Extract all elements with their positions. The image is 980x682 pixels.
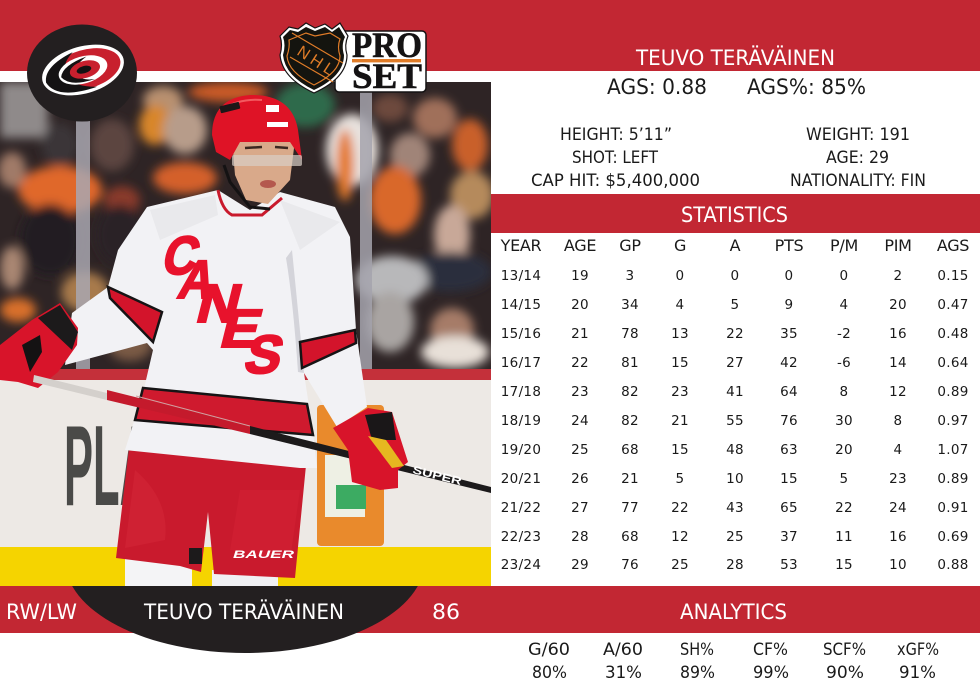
statistics table: 81: [621, 355, 639, 371]
statistics table: 16/17: [501, 355, 541, 371]
black name arc: [72, 586, 418, 653]
pro set logo: [280, 23, 426, 96]
player name heading: TEUVO TERÄVÄINEN: [635, 45, 835, 70]
analytics table: SH%: [680, 640, 714, 659]
player bio left: HEIGHT: 5’11”: [560, 125, 672, 144]
left glove: [0, 303, 78, 388]
crowd behind glass: [0, 82, 494, 372]
player bio right: WEIGHT: 191: [806, 125, 910, 144]
statistics table: 30: [835, 413, 853, 429]
orange board ad: [317, 405, 384, 546]
statistics table: 76: [780, 413, 798, 429]
statistics band: [491, 194, 980, 233]
jersey wordmark: S: [239, 324, 290, 385]
statistics table: 64: [780, 384, 798, 400]
statistics table: 15: [671, 442, 689, 458]
table header: G: [674, 236, 686, 255]
icon: hurricanes logo: [36, 36, 130, 104]
statistics table: 42: [780, 355, 798, 371]
jersey number: 86: [432, 600, 460, 624]
logo wordmark: PRO: [352, 25, 422, 65]
statistics table: 20: [889, 297, 907, 313]
statistics table: 27: [571, 500, 589, 516]
statistics heading: STATISTICS: [681, 203, 788, 227]
icon: nhl shield: [280, 23, 348, 93]
jersey wordmark: [164, 235, 283, 374]
player bio left: SHOT: LEFT: [572, 148, 659, 167]
jersey collar: [218, 190, 282, 215]
hem stripe: [135, 388, 313, 435]
pro set logo: SET: [352, 56, 422, 96]
jersey wordmark: A: [173, 249, 222, 310]
analytics table: xGF%: [897, 640, 939, 659]
table header: PIM: [884, 236, 912, 255]
statistics table: 25: [571, 442, 589, 458]
statistics table: 20: [835, 442, 853, 458]
analytics table: 99%: [753, 663, 789, 682]
statistics table: 16: [889, 529, 907, 545]
header band: [0, 0, 980, 71]
statistics table: 53: [780, 557, 798, 573]
statistics table: 14/15: [501, 297, 541, 313]
table header: A: [730, 236, 741, 255]
statistics table: 0.88: [937, 557, 969, 573]
analytics table: 90%: [826, 663, 864, 682]
statistics table: 8: [894, 413, 902, 429]
player name: TEUVO TERÄVÄINEN: [143, 599, 344, 624]
analytics table: [528, 640, 939, 682]
stick brand text: SUPER: [411, 464, 463, 488]
analytics table: A/60: [603, 640, 643, 659]
statistics table: 37: [780, 529, 798, 545]
statistics table: 15: [835, 557, 853, 573]
statistics table: 0.97: [937, 413, 969, 429]
statistics table: 0.89: [937, 384, 969, 400]
table header: AGS: [937, 236, 969, 255]
statistics table: 3: [626, 268, 634, 284]
player bio right: NATIONALITY: FIN: [790, 171, 926, 190]
shield text: NHL: [294, 43, 337, 79]
statistics table: 0: [731, 268, 739, 284]
statistics table: 68: [621, 442, 639, 458]
dasher boards: [0, 369, 491, 586]
statistics table: 5: [676, 471, 684, 487]
statistics table: 0: [676, 268, 684, 284]
legs: [125, 559, 278, 586]
table header: P/M: [830, 236, 858, 255]
jersey wordmark: C: [157, 225, 206, 286]
statistics table: 24: [889, 500, 907, 516]
statistics table: 76: [621, 557, 639, 573]
statistics table: 21/22: [501, 500, 541, 516]
statistics table: 2: [894, 268, 902, 284]
statistics table: 0.47: [937, 297, 969, 313]
analytics table: SCF%: [823, 640, 866, 659]
statistics table: 26: [571, 471, 589, 487]
statistics table: 16: [889, 326, 907, 342]
right sleeve stripe: [300, 330, 356, 368]
player bio right: [790, 125, 926, 190]
statistics table: 19: [571, 268, 589, 284]
statistics table: 21: [571, 326, 589, 342]
statistics table: 9: [785, 297, 793, 313]
analytics table: 89%: [680, 663, 715, 682]
table header: AGE: [564, 236, 596, 255]
statistics table: 22: [571, 355, 589, 371]
ags score: AGS%: 85%: [747, 75, 866, 100]
bottom band: [0, 586, 980, 633]
statistics table: 12: [889, 384, 907, 400]
position label: RW/LW: [6, 600, 77, 624]
table header: YEAR: [500, 236, 542, 255]
statistics table: 35: [780, 326, 798, 342]
statistics table: 0: [840, 268, 848, 284]
right glove: [333, 408, 408, 490]
statistics table: 15: [671, 355, 689, 371]
statistics table: -6: [837, 355, 851, 371]
analytics table: 91%: [899, 663, 936, 682]
statistics table: 23/24: [501, 557, 541, 573]
hockey stick: [33, 375, 491, 493]
statistics table: 13/14: [501, 268, 541, 284]
player: [0, 95, 491, 590]
player bio left: CAP HIT: $5,400,000: [531, 171, 700, 190]
statistics table: 0.91: [937, 500, 969, 516]
left sleeve stripe: [108, 287, 162, 342]
statistics table: 34: [621, 297, 639, 313]
statistics table: 22: [671, 500, 689, 516]
statistics table: 23: [671, 384, 689, 400]
analytics table: CF%: [753, 640, 788, 659]
statistics table: 82: [621, 384, 639, 400]
jersey: [65, 190, 367, 468]
statistics table: 43: [726, 500, 744, 516]
statistics table: 82: [621, 413, 639, 429]
statistics table: 0.15: [937, 268, 969, 284]
statistics table: 65: [780, 500, 798, 516]
statistics table: 22: [835, 500, 853, 516]
statistics table: 12: [671, 529, 689, 545]
ags score: [607, 75, 866, 100]
statistics table: 11: [835, 529, 853, 545]
statistics table: 25: [671, 557, 689, 573]
statistics table: 77: [621, 500, 639, 516]
statistics table: 25: [726, 529, 744, 545]
statistics table: 0.48: [937, 326, 969, 342]
statistics table: 19/20: [501, 442, 541, 458]
statistics table: 55: [726, 413, 744, 429]
statistics table: 48: [726, 442, 744, 458]
brand text: BAUER: [233, 549, 294, 561]
statistics table: 14: [889, 355, 907, 371]
statistics table: 20: [571, 297, 589, 313]
statistics table: 0.69: [937, 529, 969, 545]
statistics table: 41: [726, 384, 744, 400]
visor: [232, 155, 302, 166]
panel: player photo: [0, 82, 494, 590]
dasher boards: PLAY: [64, 403, 176, 530]
jersey wordmark: E: [215, 298, 268, 359]
analytics table: G/60: [528, 640, 570, 659]
statistics table: 22/23: [501, 529, 541, 545]
neck and face: [224, 140, 295, 209]
statistics table: 5: [840, 471, 848, 487]
analytics table: 80%: [532, 663, 567, 682]
team logo puck: [27, 24, 137, 122]
statistics table: 8: [840, 384, 848, 400]
statistics table: 78: [621, 326, 639, 342]
glass stanchions: [76, 82, 372, 372]
statistics table: 29: [571, 557, 589, 573]
statistics table: 21: [671, 413, 689, 429]
statistics table: -2: [837, 326, 851, 342]
statistics table: 4: [894, 442, 902, 458]
statistics table: 21: [621, 471, 639, 487]
statistics table: 18/19: [501, 413, 541, 429]
statistics table: 28: [726, 557, 744, 573]
helmet: [212, 95, 302, 166]
statistics table: 10: [726, 471, 744, 487]
jersey wordmark: N: [191, 273, 248, 334]
statistics table: 23: [571, 384, 589, 400]
hockey pants: [116, 440, 307, 578]
statistics table: 20/21: [501, 471, 541, 487]
analytics heading: ANALYTICS: [680, 600, 787, 624]
statistics table: 68: [621, 529, 639, 545]
statistics table: 22: [726, 326, 744, 342]
statistics table: 28: [571, 529, 589, 545]
statistics table: 1.07: [937, 442, 969, 458]
statistics table: 24: [571, 413, 589, 429]
statistics table: 0.64: [937, 355, 969, 371]
ags score: AGS: 0.88: [607, 75, 707, 100]
table header: PTS: [775, 236, 803, 255]
statistics table: 27: [726, 355, 744, 371]
statistics table: 0.89: [937, 471, 969, 487]
statistics table: 4: [840, 297, 848, 313]
analytics table: 31%: [605, 663, 642, 682]
statistics table: 15: [780, 471, 798, 487]
statistics table: 15/16: [501, 326, 541, 342]
statistics table: 17/18: [501, 384, 541, 400]
table header: GP: [619, 236, 641, 255]
logo plate: [335, 31, 426, 92]
statistics table: [500, 236, 969, 573]
statistics table: 0: [785, 268, 793, 284]
statistics table: 5: [731, 297, 739, 313]
player bio right: AGE: 29: [826, 148, 889, 167]
statistics table: 10: [889, 557, 907, 573]
statistics table: 13: [671, 326, 689, 342]
statistics table: 4: [676, 297, 684, 313]
player bio left: [531, 125, 700, 190]
statistics table: 23: [889, 471, 907, 487]
statistics table: 63: [780, 442, 798, 458]
